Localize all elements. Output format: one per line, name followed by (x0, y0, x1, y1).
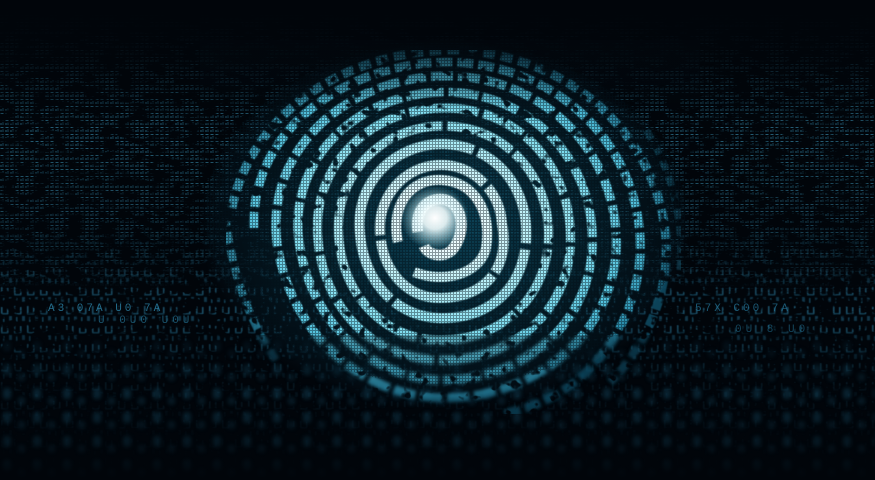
code characters on the right: 57X C00 7A (695, 303, 791, 315)
code characters on the left: U 0U0 U0U (98, 315, 193, 327)
code characters on the left (48, 303, 193, 327)
fingerprint: sharp outer ridges (226, 50, 681, 335)
code characters on the right: 0U 8 U0 (735, 324, 809, 336)
fingerprint: inner ridges (359, 144, 526, 318)
bright core of the fingerprint (401, 186, 469, 250)
fingerprint glow halo (200, 40, 690, 410)
code characters on the left: A3 07A U0 7A (48, 303, 163, 315)
code characters on the right (695, 303, 809, 336)
data field: blurred foreground code (2, 343, 875, 464)
dim upper edge of the fingerprint (200, 40, 700, 110)
top shadow (0, 0, 875, 70)
fingerprint: out-of-focus lower ridges (257, 335, 651, 414)
dot mesh texture over the ridges (205, 45, 685, 385)
bottom shadow (0, 400, 875, 480)
